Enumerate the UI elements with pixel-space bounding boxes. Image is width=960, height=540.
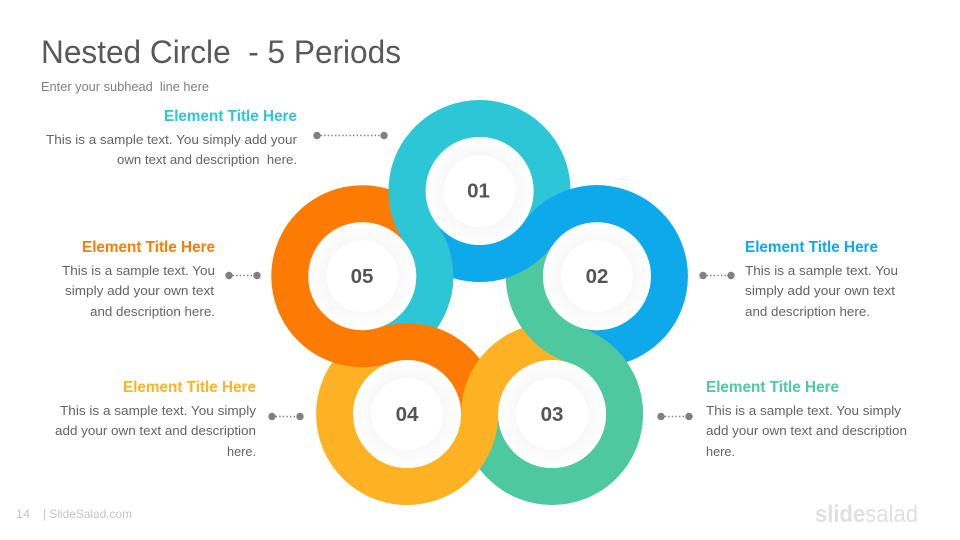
text block 02: This is a sample text. You xyxy=(745,263,898,278)
text block 01 xyxy=(46,108,298,167)
band: yellow S curve xyxy=(418,314,584,510)
text block 02 xyxy=(745,239,898,319)
text block 05: This is a sample text. You xyxy=(62,263,215,278)
band: green S curve xyxy=(496,226,662,422)
text block 04: Element Title Here xyxy=(123,379,256,396)
hub 01: 01 xyxy=(467,180,490,202)
text block 05: simply add your own text xyxy=(65,283,214,298)
band: blue S curve xyxy=(416,163,624,282)
band: orange S curve xyxy=(289,306,497,424)
band: teal overlap over blue xyxy=(407,148,435,288)
text block 04: add your own text and description xyxy=(55,423,256,438)
subhead: Enter your subhead line here xyxy=(41,80,209,94)
hub 01 xyxy=(426,137,534,245)
hub 03: 03 xyxy=(541,403,563,426)
hub 04 xyxy=(353,360,461,468)
footer logo: slidesalad xyxy=(815,501,918,528)
band: teal S curve xyxy=(375,148,435,348)
text block 03: This is a sample text. You simply xyxy=(706,403,902,418)
connector 01 xyxy=(313,132,388,139)
text block 05 xyxy=(62,239,215,319)
text block 04: This is a sample text. You simply xyxy=(60,403,257,418)
hub 02 xyxy=(543,222,651,330)
text block 03: Element Title Here xyxy=(706,379,839,396)
connector 03 xyxy=(657,413,693,420)
text block 05: and description here. xyxy=(90,304,215,319)
text block 02: simply add your own text xyxy=(745,283,895,298)
text block 03 xyxy=(706,379,907,459)
text block 01: This is a sample text. You simply add your xyxy=(46,132,298,147)
hub 02: 02 xyxy=(586,265,608,288)
text block 03: add your own text and description xyxy=(706,423,907,438)
nested circle diagram xyxy=(289,118,669,510)
connector 05 xyxy=(225,272,261,279)
text block 01: Element Title Here xyxy=(164,108,297,125)
ring bases xyxy=(290,118,669,487)
footer site name: | SlideSalad.com xyxy=(43,507,132,521)
footer page number: 14 xyxy=(16,507,30,521)
title: Nested Circle - 5 Periods xyxy=(41,34,401,70)
text block 02: and description here. xyxy=(745,304,870,319)
hub 05 xyxy=(308,222,416,330)
hub 04: 04 xyxy=(396,403,419,426)
hub 05: 05 xyxy=(351,265,373,288)
text block 02: Element Title Here xyxy=(745,239,878,256)
text block 04: here. xyxy=(227,444,256,459)
text block 04 xyxy=(55,379,257,459)
text block 05: Element Title Here xyxy=(82,239,215,256)
text block 01: own text and description here. xyxy=(117,152,297,167)
connector 02 xyxy=(699,272,735,279)
hub 03 xyxy=(498,360,606,468)
text block 03: here. xyxy=(706,444,735,459)
connector 04 xyxy=(268,413,304,420)
